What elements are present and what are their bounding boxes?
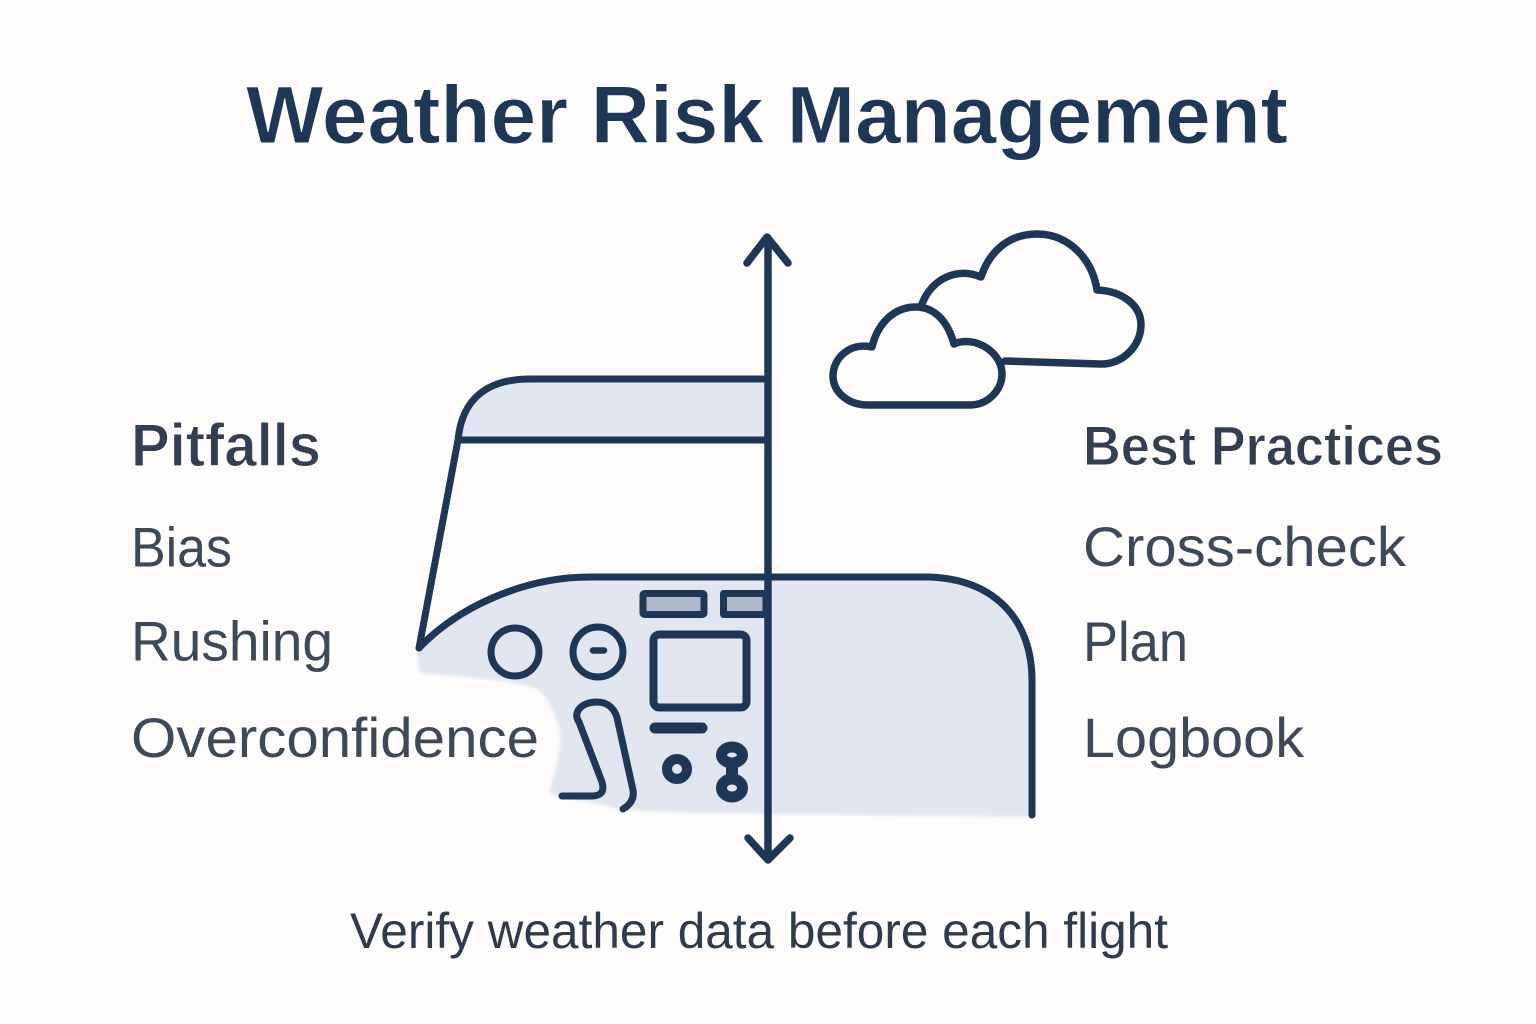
control bar	[655, 722, 702, 734]
item: rushing: Rushing	[131, 610, 333, 672]
indicator: left	[643, 594, 704, 614]
heading: best practices: Best Practices	[1083, 414, 1443, 477]
double-headed arrow	[747, 237, 790, 860]
yoke lever	[562, 702, 633, 809]
panel: pitfalls list	[131, 412, 539, 769]
dual knob	[722, 747, 742, 797]
panel: best practices list	[1083, 414, 1443, 769]
item: logbook: Logbook	[1083, 706, 1305, 769]
panel outline	[419, 577, 1032, 815]
item: cross-check: Cross-check	[1083, 515, 1407, 578]
front cloud	[833, 307, 1002, 405]
item: bias: Bias	[131, 516, 232, 578]
windshield shade	[458, 379, 765, 440]
title: Weather Risk Management	[246, 70, 1288, 161]
display screen	[654, 634, 746, 708]
illustration: cockpit	[417, 379, 1032, 817]
windshield frame	[419, 379, 765, 648]
item: overconfidence: Overconfidence	[131, 706, 539, 769]
instrument panel fill	[417, 577, 1032, 817]
knob	[667, 759, 687, 779]
gauge: left	[491, 628, 539, 676]
icon: clouds	[833, 234, 1141, 405]
heading: pitfalls: Pitfalls	[131, 412, 321, 479]
gauge: right	[573, 627, 623, 677]
back cloud	[922, 234, 1141, 364]
indicator: right	[724, 594, 766, 614]
item: plan: Plan	[1083, 610, 1188, 673]
footer note: Verify weather data before each flight	[350, 903, 1168, 959]
